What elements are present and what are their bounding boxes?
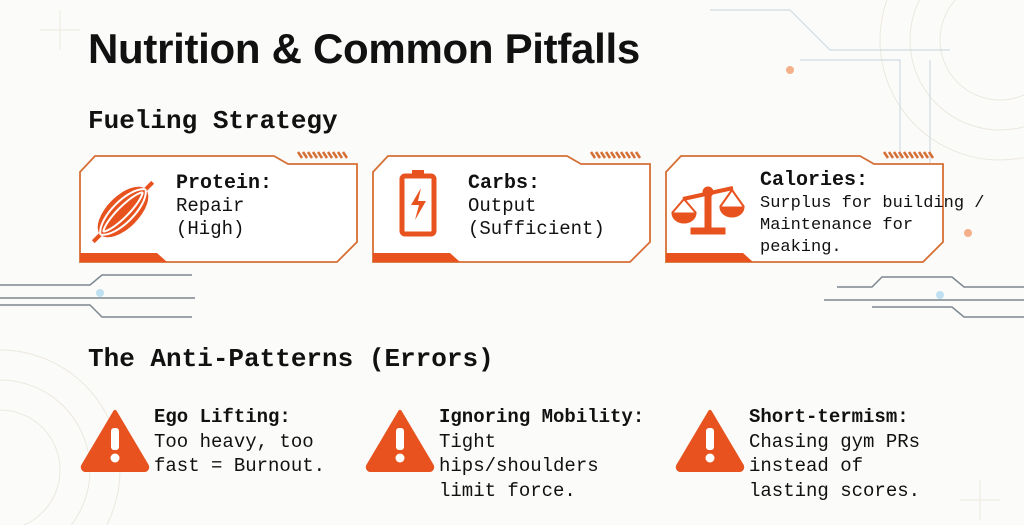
heading: fueling strategy: Fueling Strategy — [88, 106, 338, 136]
error: short-termism: lasting scores. — [749, 480, 920, 502]
error: ego lifting: Too heavy, too — [154, 430, 314, 452]
error: ignoring mobility: Tight — [439, 430, 496, 452]
error: short-termism: Chasing gym PRs — [749, 430, 920, 452]
heading: anti-patterns: The Anti-Patterns (Errors) — [88, 344, 494, 374]
card: protein: Protein: — [176, 172, 272, 195]
error: ego lifting — [80, 406, 325, 477]
card: carbs: Output — [468, 195, 536, 217]
error: short-termism — [676, 406, 920, 502]
card: carbs — [372, 151, 651, 263]
error: short-termism: instead of — [749, 455, 863, 477]
card: carbs: Carbs: — [468, 172, 540, 195]
icon: scale — [672, 187, 744, 234]
icon: muscle — [82, 171, 164, 253]
error: short-termism: Short-termism: — [749, 406, 909, 428]
icon: warning — [80, 410, 150, 472]
error: ego lifting: Ego Lifting: — [154, 406, 291, 428]
error: ignoring mobility — [366, 406, 644, 502]
card: protein: (High) — [176, 218, 244, 240]
error: ignoring mobility: hips/shoulders — [439, 455, 599, 477]
card: calories: Maintenance for — [760, 216, 913, 235]
error: ignoring mobility: limit force. — [439, 480, 576, 502]
error: ignoring mobility: Ignoring Mobility: — [439, 406, 644, 428]
card: calories: peaking. — [760, 238, 842, 257]
card: calories — [665, 151, 984, 263]
card: calories: Calories: — [760, 169, 868, 192]
card: protein — [79, 151, 358, 263]
card: protein: Repair — [176, 195, 244, 217]
card: calories: Surplus for building / — [760, 194, 984, 213]
error: ego lifting: fast = Burnout. — [154, 455, 325, 477]
icon: battery — [402, 170, 434, 234]
card: carbs: (Sufficient) — [468, 218, 605, 240]
title: Nutrition & Common Pitfalls — [88, 25, 640, 72]
